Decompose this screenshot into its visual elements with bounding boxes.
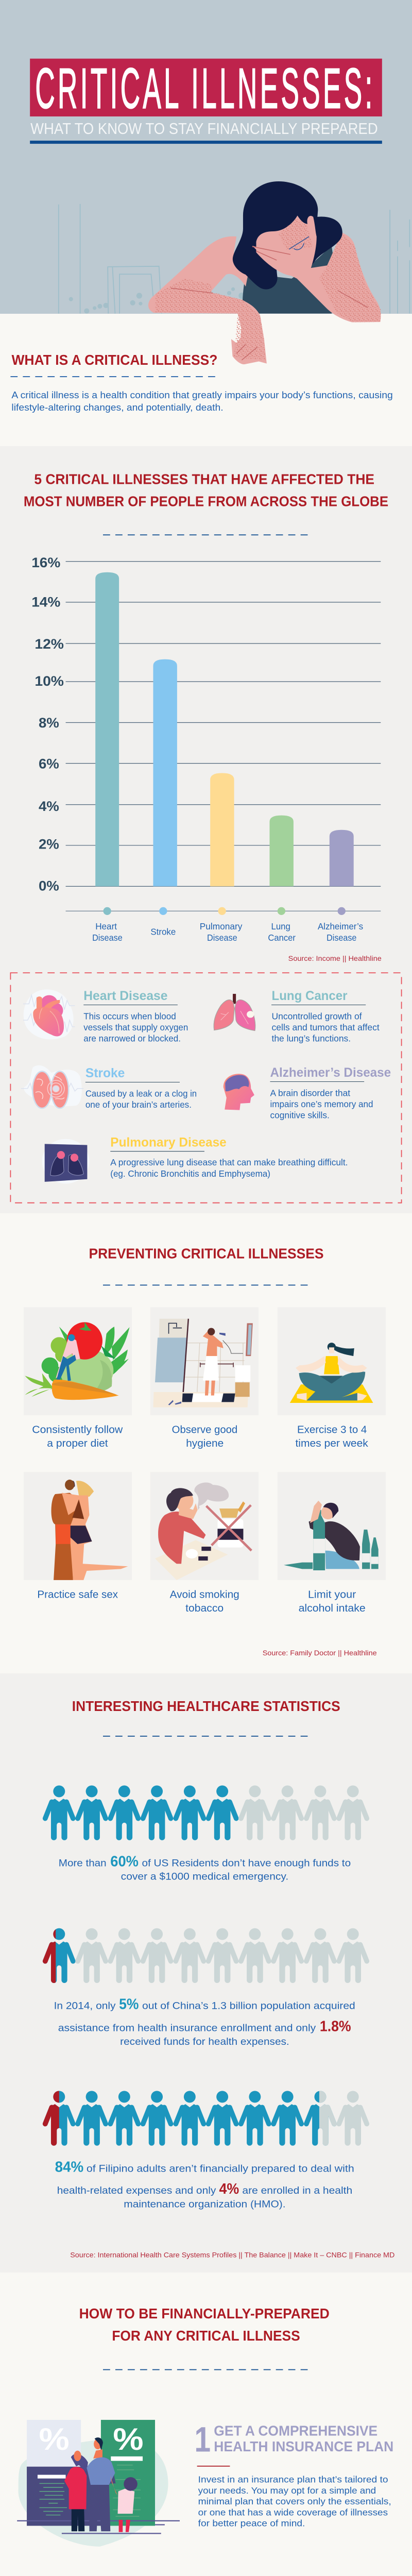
- section: healthcare statistics: [45, 1649, 377, 2047]
- caption: limit alcohol: [299, 1589, 366, 1614]
- icon: lungs: [214, 994, 255, 1031]
- caption: good hygiene: [172, 1425, 237, 1449]
- heading: INTERESTING HEALTHCARE STATISTICS: [72, 1698, 340, 1714]
- section: chart legend and disease descriptions: [10, 907, 402, 1203]
- heading: [24, 471, 388, 510]
- icon: head with puzzle: [224, 1074, 254, 1110]
- bar chart: 2%: [39, 836, 59, 852]
- panel: disease descriptions: [10, 973, 402, 1203]
- pictogram: 5 percent and 1.8 percent: [45, 1928, 367, 1983]
- text: stroke: [85, 1066, 197, 1110]
- heading: FOR ANY CRITICAL ILLNESS: [112, 2328, 300, 2344]
- source note: Source: Income || Healthline: [288, 955, 382, 963]
- panel: exercise: [278, 1307, 386, 1415]
- caption: good hygiene: Observe good: [172, 1425, 237, 1436]
- stat text: 60 percent: 60%: [110, 1853, 139, 1870]
- stat text: 5 percent and 1.8 percent: 1.8%: [320, 2018, 351, 2035]
- chart legend: Disease: [207, 933, 237, 943]
- text: stroke: Caused by a leak or a clog in: [85, 1089, 197, 1099]
- illustration: family and insurance plans: %: [39, 2422, 70, 2456]
- chart legend: Lung: [271, 921, 290, 931]
- caption: exercise: [295, 1425, 369, 1449]
- text: step 1: minimal plan that covers only the essentials,: [198, 2496, 391, 2506]
- text: pulmonary disease: Pulmonary Disease: [110, 1136, 227, 1150]
- text: stroke: one of your brain’s arteries.: [85, 1099, 192, 1110]
- definition text: A critical illness is a health condition that greatly impairs your body’s functions, causing: [11, 389, 393, 400]
- chart legend: Stroke: [150, 926, 176, 937]
- stat text: 5 percent and 1.8 percent: 5%: [119, 1996, 139, 2012]
- text: alzheimer's disease: cognitive skills.: [270, 1110, 330, 1120]
- stat text: 5 percent and 1.8 percent: [54, 1996, 355, 2047]
- text: heart disease: are narrowed or blocked.: [83, 1033, 181, 1043]
- text: alzheimer's disease: A brain disorder that: [270, 1088, 350, 1098]
- financial preparation band background: [0, 2273, 412, 2576]
- text: alzheimer's disease: impairs one’s memory and: [270, 1099, 373, 1109]
- bar chart: [31, 555, 381, 894]
- caption: good hygiene: hygiene: [186, 1438, 224, 1449]
- chart legend: Pulmonary: [200, 921, 243, 931]
- bar chart: 12%: [35, 636, 64, 652]
- text: lung cancer: [271, 989, 380, 1043]
- heading: 5 CRITICAL ILLNESSES THAT HAVE AFFECTED THE: [34, 471, 374, 487]
- stat text: 5 percent and 1.8 percent: out of China’s 1.3 billion population acquired: [142, 2000, 355, 2011]
- caption: limit alcohol: alcohol intake: [299, 1603, 366, 1614]
- panel: proper diet: [24, 1307, 132, 1415]
- illustration: family and insurance plans: [17, 2420, 180, 2547]
- section: what is a critical illness: [10, 352, 393, 413]
- chart legend: [66, 907, 381, 943]
- icon: brain: [21, 1065, 83, 1108]
- panel: avoid smoking: [150, 1472, 259, 1580]
- caption: proper diet: a proper diet: [47, 1438, 108, 1449]
- text: alzheimer's disease: Alzheimer’s Disease: [270, 1065, 391, 1080]
- text: lung cancer: Uncontrolled growth of: [272, 1011, 362, 1022]
- text: pulmonary disease: A progressive lung disease that can make breathing difficult.: [110, 1157, 348, 1167]
- intro band background: [0, 314, 412, 446]
- illustration: woman with head in hand: [148, 181, 381, 364]
- stat text: 84 percent and 4 percent: are enrolled in a health: [242, 2185, 352, 2196]
- heading: WHAT IS A CRITICAL ILLNESS?: [11, 352, 217, 368]
- text: step 1: [198, 2474, 391, 2529]
- caption: avoid smoking: Avoid smoking: [170, 1589, 239, 1601]
- caption: avoid smoking: [170, 1589, 239, 1614]
- stat text: 5 percent and 1.8 percent: received funds for health expenses.: [120, 2036, 289, 2047]
- stat text: 84 percent and 4 percent: of Filipino adults aren’t financially prepared to deal with: [87, 2163, 354, 2174]
- caption: avoid smoking: tobacco: [185, 1603, 224, 1614]
- heading: [79, 2306, 330, 2344]
- chart legend: Heart: [95, 921, 117, 931]
- subtitle: [30, 121, 382, 144]
- bar chart: 14%: [31, 595, 60, 610]
- chart legend: Disease: [92, 933, 123, 943]
- subtitle: WHAT TO KNOW TO STAY FINANCIALLY PREPARED: [30, 121, 378, 138]
- step 1 heading: 1: [195, 2420, 211, 2460]
- chart legend: Cancer: [268, 933, 296, 943]
- chart legend: Alzheimer’s: [318, 921, 363, 931]
- text: pulmonary disease: [110, 1136, 348, 1179]
- text: stroke: Stroke: [85, 1066, 125, 1080]
- stat text: 84 percent and 4 percent: 84%: [55, 2159, 83, 2175]
- icon: heart: [23, 989, 75, 1039]
- text: heart disease: This occurs when blood: [83, 1011, 176, 1022]
- stat text: 5 percent and 1.8 percent: assistance from health insurance enrollment and only: [58, 2022, 316, 2033]
- source note: Source: Family Doctor || Healthline: [263, 1649, 377, 1657]
- step 1 heading: GET A COMPREHENSIVE: [214, 2423, 377, 2439]
- chart legend: Disease: [327, 933, 356, 943]
- text: step 1: your needs. You may opt for a simple and: [198, 2485, 376, 2496]
- section: bar chart: [24, 471, 388, 894]
- icon: x-ray: [42, 1139, 89, 1183]
- background room dots: [69, 287, 245, 314]
- statistics band background: [0, 1673, 412, 2273]
- panel: limit alcohol: [278, 1472, 386, 1580]
- bar chart: 0%: [39, 878, 59, 894]
- heading: HOW TO BE FINANCIALLY-PREPARED: [79, 2306, 330, 2321]
- background room lines: [59, 204, 409, 314]
- illustration: family and insurance plans: %: [113, 2422, 144, 2456]
- pictogram: 84 percent and 4 percent: [45, 2091, 367, 2146]
- heading: MOST NUMBER OF PEOPLE FROM ACROSS THE GLOBE: [24, 494, 388, 510]
- stat text: 84 percent and 4 percent: 4%: [219, 2181, 239, 2197]
- source note: Source: International Health Care Systems Profiles || The Balance || Make It – CNBC || Finance MD: [70, 2251, 394, 2260]
- caption: safe sex: Practice safe sex: [37, 1589, 118, 1601]
- section: steps 1 to 3: [12, 2420, 392, 2576]
- text: pulmonary disease: (eg. Chronic Bronchitis and Emphysema): [110, 1168, 270, 1179]
- section: preventing critical illnesses: [24, 1245, 386, 1614]
- text: alzheimer's disease: [270, 1065, 391, 1120]
- text: heart disease: [83, 989, 188, 1043]
- bar chart: 4%: [39, 799, 59, 814]
- caption: limit alcohol: Limit your: [308, 1589, 356, 1601]
- panel: safe sex: [24, 1472, 132, 1580]
- step 1 heading: [195, 2420, 393, 2466]
- text: step 1: for better peace of mind.: [198, 2518, 305, 2529]
- text: lung cancer: the lung’s functions.: [272, 1033, 351, 1043]
- caption: proper diet: [32, 1425, 123, 1449]
- stat text: 84 percent and 4 percent: maintenance organization (HMO).: [124, 2199, 286, 2210]
- section: statistics 3 and how-to heading: [45, 2091, 394, 2466]
- prevention band background: [0, 1213, 412, 1673]
- stat text: 84 percent and 4 percent: health-related expenses and only: [57, 2185, 216, 2196]
- bar chart: 10%: [35, 673, 64, 689]
- text: lung cancer: Lung Cancer: [272, 989, 348, 1003]
- text: lung cancer: cells and tumors that affect: [272, 1022, 380, 1032]
- text: heart disease: Heart Disease: [83, 989, 168, 1003]
- stat text: 5 percent and 1.8 percent: In 2014, only: [54, 2000, 116, 2011]
- stat text: 60 percent: More than: [59, 1857, 107, 1869]
- hero section: [30, 57, 409, 364]
- bar chart: 8%: [39, 715, 59, 731]
- bar chart: 16%: [31, 555, 60, 570]
- panel: good hygiene: [150, 1307, 259, 1415]
- bar chart: 6%: [39, 756, 59, 771]
- heading: PREVENTING CRITICAL ILLNESSES: [89, 1245, 324, 1261]
- caption: proper diet: Consistently follow: [32, 1425, 123, 1436]
- chart band background: [0, 446, 412, 1213]
- caption: exercise: times per week: [295, 1438, 369, 1449]
- stat text: 60 percent: [59, 1853, 351, 1882]
- definition text: [11, 389, 393, 413]
- stat text: 84 percent and 4 percent: [55, 2159, 354, 2210]
- caption: exercise: Exercise 3 to 4: [297, 1425, 367, 1436]
- step 1 heading: HEALTH INSURANCE PLAN: [214, 2438, 393, 2454]
- stat text: 60 percent: cover a $1000 medical emergency.: [121, 1871, 288, 1882]
- hero background: [0, 0, 412, 314]
- definition text: lifestyle-altering changes, and potentially, death.: [11, 402, 224, 413]
- text: step 1: or one that has a wide coverage of illnesses: [198, 2507, 388, 2518]
- text: step 1: Invest in an insurance plan that’s tailored to: [198, 2474, 388, 2484]
- pictogram: 60 percent: [45, 1786, 367, 1840]
- stat text: 60 percent: of US Residents don’t have enough funds to: [142, 1857, 351, 1869]
- text: heart disease: vessels that supply oxygen: [83, 1022, 188, 1032]
